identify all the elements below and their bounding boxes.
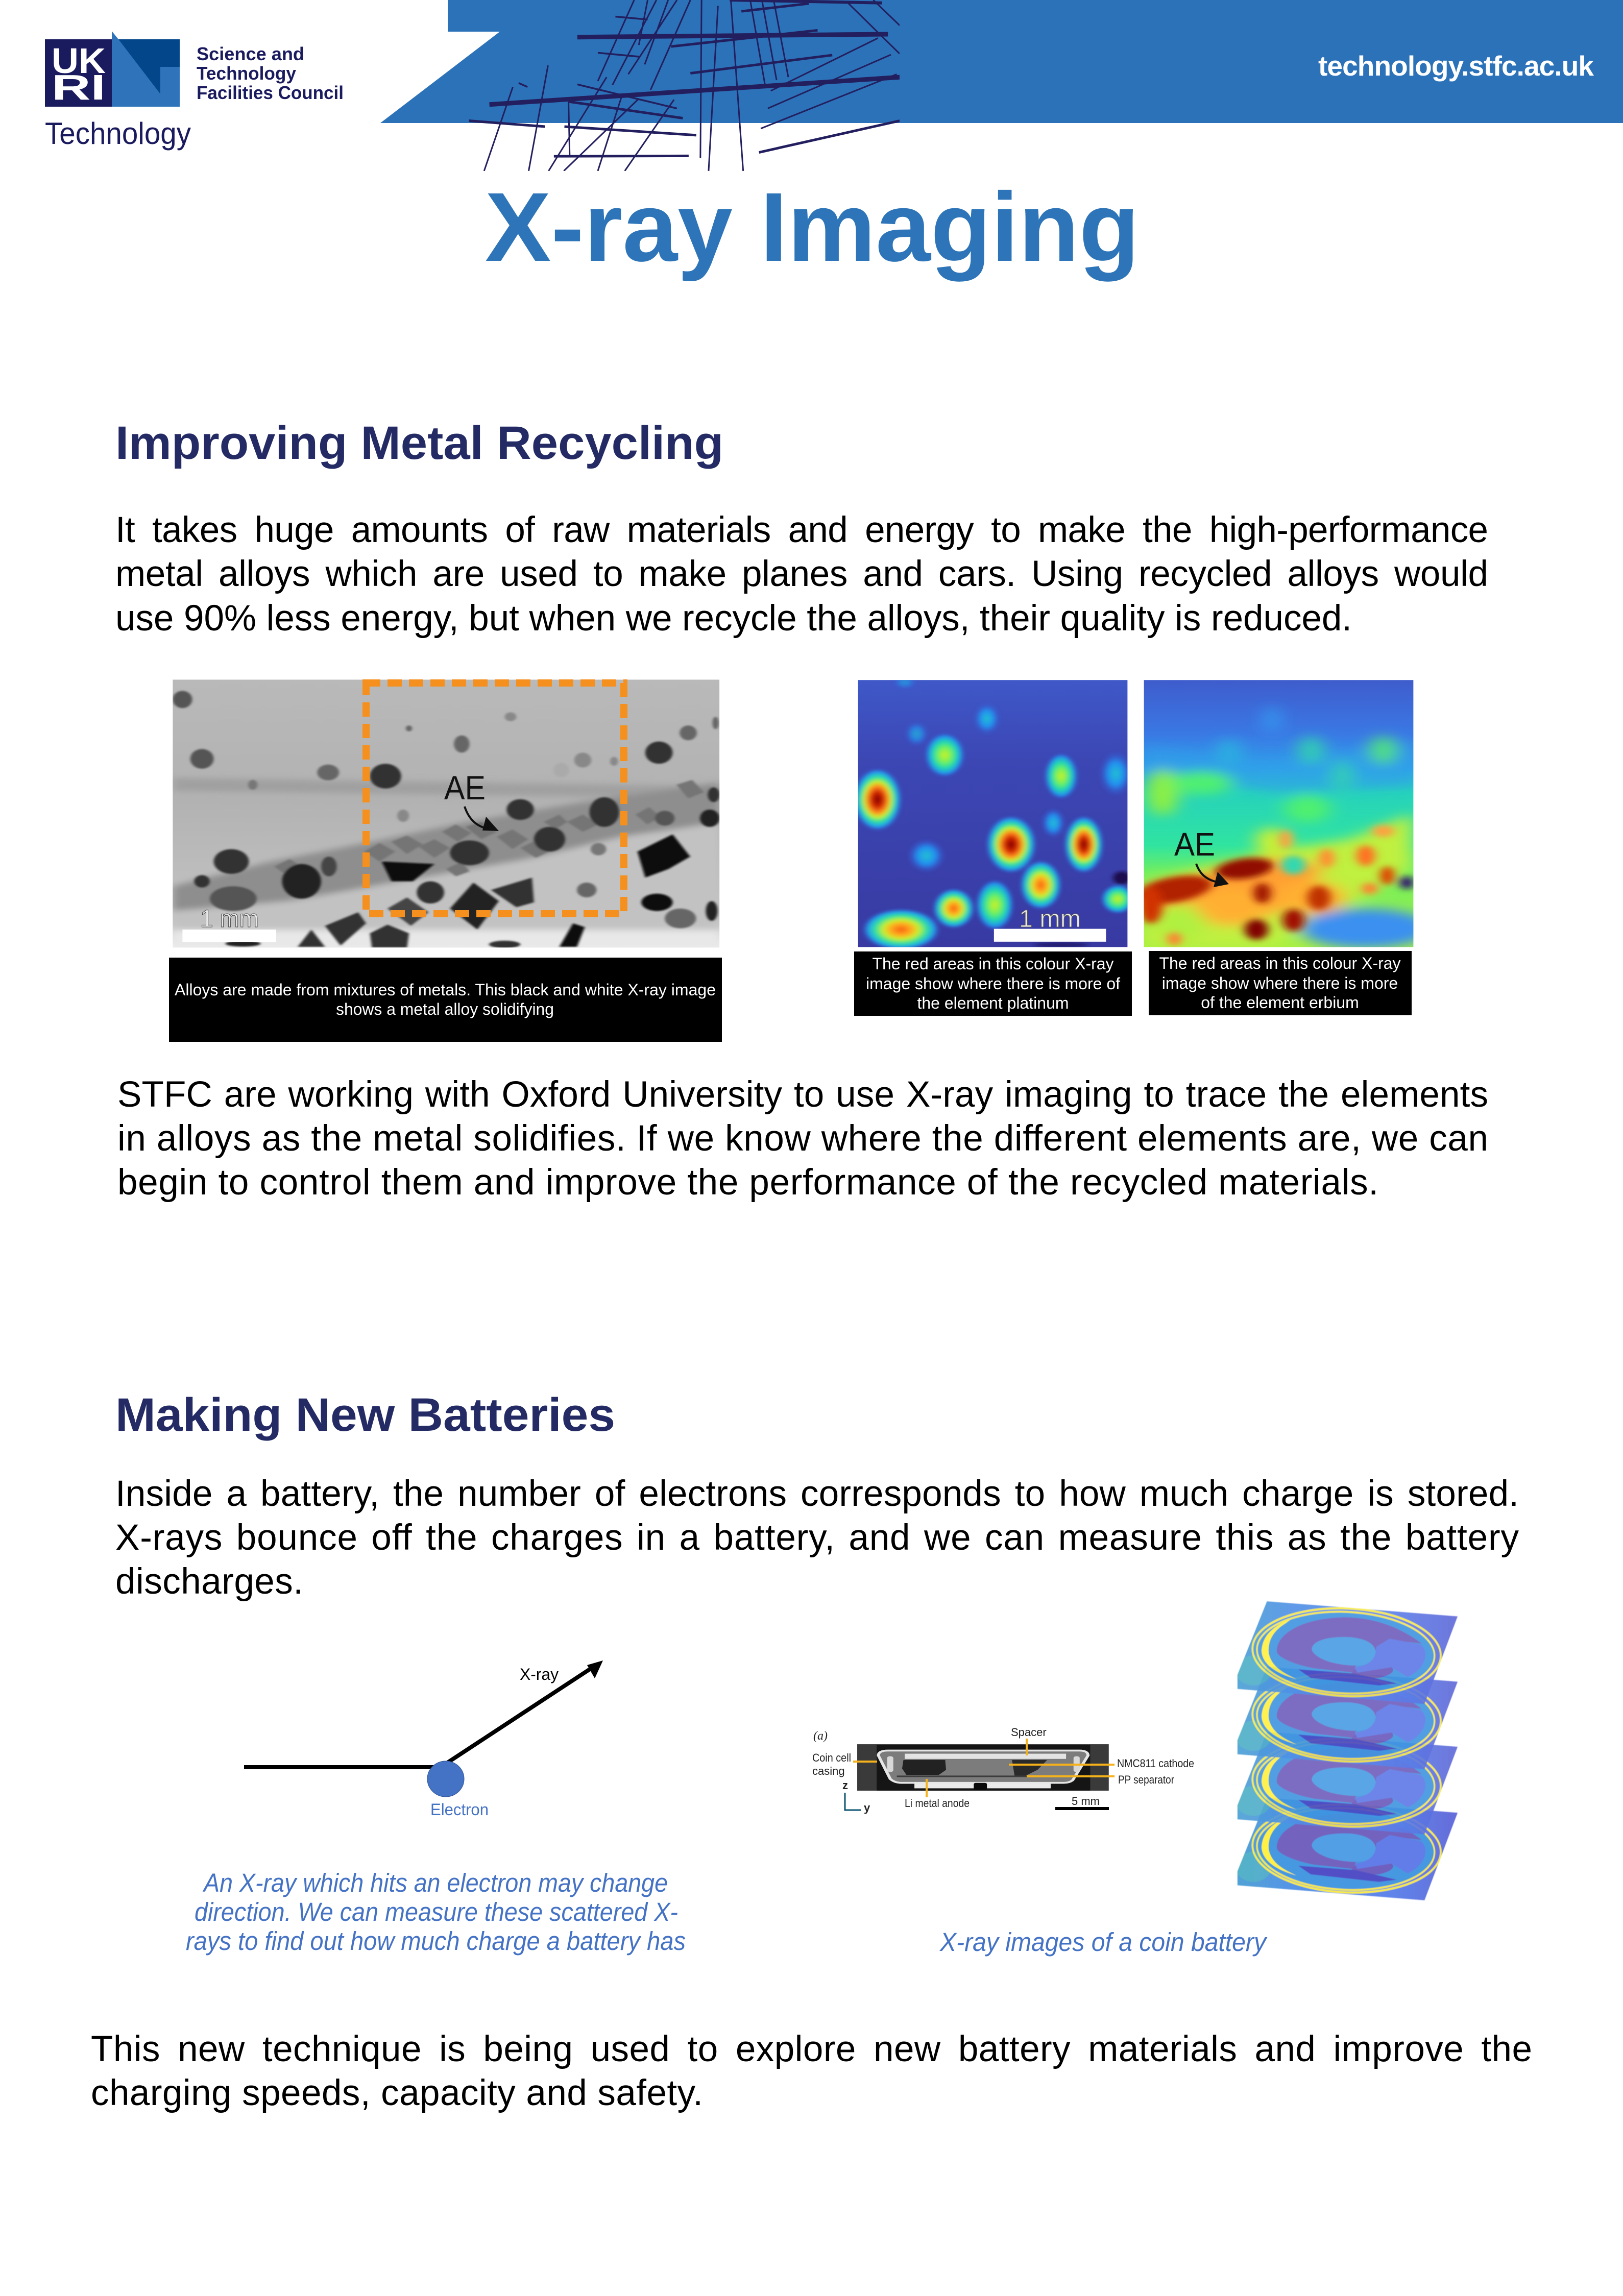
- slice 1: [1236, 1601, 1458, 1704]
- labels: y: [864, 1801, 870, 1814]
- caption: black and white image: shows a metal alloy solidifying: [336, 1000, 554, 1018]
- labels: Spacer: [1011, 1726, 1047, 1739]
- slice 3: [1236, 1732, 1458, 1835]
- header banner: [380, 0, 1623, 171]
- logo: UKRI Science and Technology Facilities Council: [45, 31, 344, 151]
- incoming X-ray line: [244, 1765, 441, 1769]
- banner blue shape: [380, 0, 1623, 123]
- scale bar: [1055, 1807, 1109, 1810]
- caption: electron diagram: direction. We can measure these scattered X-: [195, 1897, 678, 1926]
- text block: STFC and Oxford: [117, 1074, 1488, 1203]
- text block: recycling intro: It takes huge amounts of raw materials and energy to make the high-performance: [115, 510, 1488, 550]
- callout lines: [853, 1739, 1115, 1797]
- caption: erbium: of the element erbium: [1201, 993, 1359, 1012]
- greyscale X-ray image: [173, 680, 719, 948]
- text block: conclusion: This new technique is being used to explore new battery materials and improve the: [91, 2029, 1532, 2069]
- text block: recycling intro: metal alloys which are used to make planes and cars. Using recycled alloys would: [115, 554, 1488, 594]
- caption: electron diagram: [186, 1868, 686, 1956]
- text block: batteries intro: X-rays bounce off the charges in a battery, and we can measure this as the battery: [115, 1518, 1519, 1558]
- orange dashed selection box: [366, 683, 624, 914]
- text block: STFC and Oxford: STFC are working with Oxford University to use X-ray imaging to trace the elements: [117, 1074, 1488, 1115]
- scale label: 1 mm: [1019, 906, 1081, 933]
- axes: [845, 1793, 861, 1810]
- text block: batteries intro: [115, 1474, 1519, 1602]
- AE arrow: [1196, 864, 1229, 887]
- panel: stacked coin battery X-ray slices: [1236, 1601, 1458, 1900]
- labels: 5 mm: [1072, 1795, 1100, 1808]
- text block: batteries intro: discharges.: [115, 1561, 303, 1602]
- council name: Facilities Council: [197, 82, 344, 103]
- text block: batteries intro: Inside a battery, the number of electrons corresponds to how much charge is stored.: [115, 1474, 1519, 1514]
- chart: X-ray scattering diagram: [244, 1660, 603, 1819]
- council name: Technology: [197, 63, 296, 84]
- banner line art: [469, 0, 900, 171]
- title: X-ray Imaging: [485, 172, 1140, 282]
- platinum colour X-ray image: [853, 675, 1134, 950]
- AE label: AE: [444, 769, 486, 807]
- text block: recycling intro: use 90% less energy, but when we recycle the alloys, their quality is reduced.: [115, 598, 1352, 639]
- heading: making new batteries: Making New Batteries: [115, 1389, 615, 1441]
- text block: conclusion: charging speeds, capacity and safety.: [91, 2073, 703, 2113]
- council name: Science and: [197, 43, 304, 64]
- labels: [812, 1726, 1194, 1814]
- website address: technology.stfc.ac.uk: [1318, 50, 1594, 82]
- labels: casing: [812, 1765, 845, 1777]
- scattered X-ray arrow: [445, 1660, 603, 1764]
- caption: platinum: the element platinum: [917, 994, 1069, 1012]
- electron: [427, 1761, 464, 1797]
- caption: electron diagram: rays to find out how much charge a battery has: [186, 1926, 686, 1956]
- caption: erbium: image show where there is more: [1162, 974, 1398, 992]
- X-ray label: X-ray: [520, 1665, 559, 1683]
- caption: black and white image: Alloys are made from mixtures of metals. This black and white X-ray image: [175, 981, 716, 999]
- text block: conclusion: [91, 2029, 1532, 2113]
- caption: erbium: [1149, 951, 1412, 1015]
- caption: black and white image: [169, 958, 722, 1042]
- heading: improving metal recycling: Improving Metal Recycling: [115, 417, 723, 469]
- technology label: Technology: [45, 116, 191, 151]
- panel: coin cell cross-section: [812, 1726, 1194, 1814]
- caption: coin battery: X-ray images of a coin battery: [939, 1927, 1268, 1957]
- labels: Li metal anode: [905, 1797, 970, 1810]
- cross-section image: [857, 1744, 1109, 1791]
- labels: z: [842, 1779, 848, 1792]
- scale label: 1 mm: [200, 906, 259, 933]
- labels: PP separator: [1118, 1773, 1174, 1786]
- caption: platinum: The red areas in this colour X-ray: [872, 955, 1114, 973]
- text block: STFC and Oxford: in alloys as the metal solidifies. If we know where the different elements are, we can: [117, 1118, 1488, 1159]
- logo mark: UK: [52, 41, 106, 81]
- text block: STFC and Oxford: begin to control them and improve the performance of the recycled materials.: [117, 1162, 1378, 1203]
- erbium colour X-ray image: [1131, 680, 1432, 948]
- logo mark: RI: [52, 67, 106, 107]
- caption: platinum: [854, 951, 1132, 1016]
- panel: platinum heat map: [853, 675, 1134, 950]
- council name: [197, 43, 344, 103]
- caption: platinum: image show where there is more of: [866, 974, 1120, 993]
- labels: (a): [813, 1729, 828, 1743]
- slice 2: [1236, 1667, 1458, 1769]
- caption: erbium: The red areas in this colour X-ray: [1159, 954, 1401, 972]
- panel: erbium heat map: [1131, 680, 1432, 948]
- caption: electron diagram: An X-ray which hits an electron may change: [202, 1868, 668, 1897]
- logo mark: [45, 31, 180, 107]
- AE label: AE: [1174, 826, 1215, 863]
- labels: Coin cell: [812, 1751, 851, 1764]
- text block: recycling intro: [115, 510, 1488, 639]
- electron label: Electron: [430, 1800, 489, 1819]
- slice 4: [1236, 1798, 1458, 1900]
- labels: NMC811 cathode: [1117, 1757, 1194, 1770]
- panel: black and white X-ray image: [173, 680, 719, 948]
- AE arrow: [465, 807, 499, 831]
